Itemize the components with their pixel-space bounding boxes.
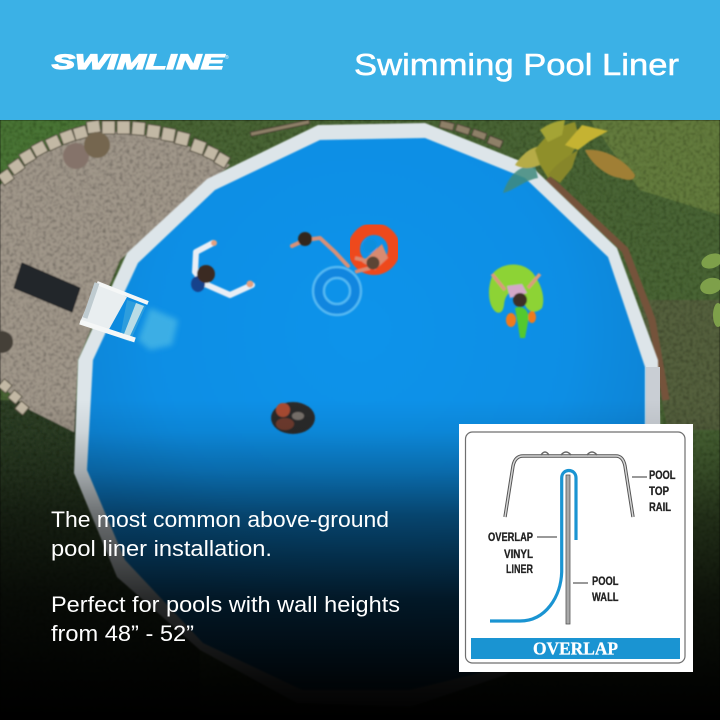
pool top rail label: POOL	[649, 468, 676, 482]
pool ladder	[80, 283, 178, 350]
swimmer on green float	[489, 264, 543, 338]
dark gradient overlay	[0, 400, 720, 720]
overlap vinyl liner label: VINYL	[504, 547, 533, 561]
swimmer in white shirt	[191, 240, 254, 295]
overlap vinyl liner label	[488, 530, 557, 576]
swimmer in dark tube	[271, 402, 315, 434]
top border bricks	[250, 120, 503, 148]
pool wall label: POOL	[592, 574, 618, 588]
blue vinyl liner	[490, 470, 576, 621]
pool wall drawing	[566, 475, 570, 624]
header band	[0, 0, 720, 120]
blue inflatable ring	[313, 267, 361, 315]
description text	[51, 507, 400, 646]
pool top rail label	[632, 468, 676, 514]
pool wall label: WALL	[592, 590, 618, 604]
garden leaves	[698, 251, 720, 327]
overlap liner diagram panel	[459, 424, 693, 672]
overlap title bar	[471, 638, 680, 659]
pool top rail	[74, 123, 660, 707]
overlap vinyl liner label: OVERLAP	[488, 530, 533, 544]
page title: Swimming Pool Liner	[354, 47, 679, 82]
description text: pool liner installation.	[51, 536, 272, 561]
overlap title bar: OVERLAP	[533, 638, 618, 658]
description text: Perfect for pools with wall heights	[51, 592, 400, 617]
drain mat	[14, 263, 80, 312]
border bricks	[0, 120, 230, 415]
swimline logo: SWIMLINE	[52, 51, 226, 74]
swimline logo: ®	[225, 54, 229, 61]
stone spheres	[0, 132, 110, 353]
pool water	[87, 138, 645, 690]
pool wall label	[573, 574, 618, 604]
swimmer reaching to the ring	[292, 232, 348, 266]
pool top rail drawing	[505, 452, 633, 517]
ribbed rail section	[646, 367, 660, 424]
orange swim ring with swimmer	[354, 229, 394, 272]
right edging	[548, 178, 666, 400]
description text: from 48” - 52”	[51, 621, 194, 646]
swimline logo	[52, 51, 229, 74]
overlap vinyl liner label: LINER	[506, 562, 533, 576]
pool top rail label: TOP	[649, 484, 669, 498]
pool top rail label: RAIL	[649, 500, 671, 514]
gravel patch	[0, 130, 230, 432]
description text: The most common above-ground	[51, 507, 389, 532]
palm fronds	[503, 120, 635, 193]
